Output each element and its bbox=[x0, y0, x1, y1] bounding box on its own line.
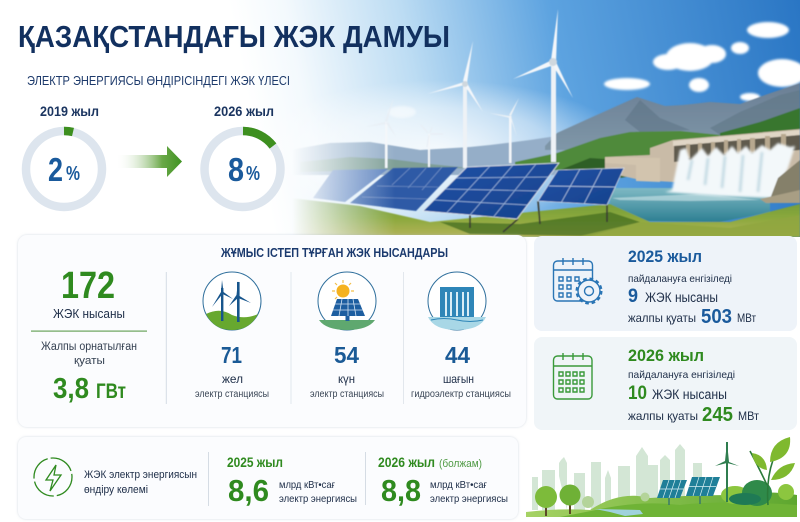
solar stations: күн bbox=[338, 372, 355, 386]
total facilities and capacity: 172 bbox=[61, 265, 115, 307]
donut: 2026 share 8%: 8 bbox=[228, 151, 244, 188]
panel: generation volume bbox=[18, 437, 518, 519]
panel: 2025 commissioning: ЖЭК нысаны bbox=[645, 290, 718, 305]
city skyline bbox=[532, 444, 702, 510]
hydro stations bbox=[411, 272, 511, 400]
mountains bbox=[545, 83, 800, 150]
wind stations bbox=[195, 272, 269, 400]
icon: calendar bbox=[554, 353, 592, 399]
panel: 2025 commissioning: 2025 жыл bbox=[628, 247, 702, 266]
donut: 2019 share 2% bbox=[26, 103, 102, 207]
2026 forecast generation: 2026 жыл bbox=[378, 455, 435, 470]
total facilities and capacity: Жалпы орнатылған bbox=[41, 341, 137, 353]
panel: 2026 commissioning: жалпы қуаты bbox=[628, 409, 698, 423]
total facilities and capacity: қуаты bbox=[74, 355, 105, 367]
2025 generation: электр энергиясы bbox=[279, 493, 357, 505]
hero photo: renewable energy landscape bbox=[266, 0, 800, 237]
wind stations: электр станциясы bbox=[195, 389, 269, 400]
panel: 2026 commissioning: ЖЭК нысаны bbox=[652, 387, 727, 402]
small solar panels bbox=[657, 477, 720, 505]
wind stations: 71 bbox=[221, 342, 242, 368]
bushes bbox=[721, 480, 772, 506]
green hills bbox=[515, 131, 720, 170]
trees bbox=[535, 484, 794, 516]
panel: 2026 commissioning: 245 bbox=[702, 404, 733, 426]
panel: 2025 commissioning: МВт bbox=[737, 311, 756, 325]
dam bbox=[605, 129, 800, 182]
heading: operating facilities: ЖҰМЫС ІСТЕП ТҰРҒАН ЖЭК НЫСАНДАРЫ bbox=[220, 245, 448, 260]
panel: 2025 commissioning: жалпы қуаты bbox=[628, 311, 696, 325]
2026 forecast generation: электр энергиясы bbox=[430, 493, 508, 505]
water bbox=[610, 188, 770, 222]
panel: generation volume: өндіру көлемі bbox=[84, 484, 148, 496]
panel: 2026 commissioning: МВт bbox=[738, 409, 759, 423]
donut: 2026 share 8%: % bbox=[246, 163, 260, 185]
panel: 2025 commissioning: 503 bbox=[701, 306, 732, 328]
wind stations: жел bbox=[222, 372, 243, 386]
panel: generation volume: ЖЭК электр энергиясын bbox=[84, 469, 197, 481]
panel: 2026 commissioning bbox=[534, 337, 797, 430]
donut: 2026 share 8% bbox=[204, 103, 280, 207]
icon: hydro dam bbox=[428, 272, 486, 330]
hydro stations: шағын bbox=[443, 372, 474, 386]
clouds bbox=[388, 22, 800, 118]
icon: calendar with gear bbox=[554, 258, 601, 303]
turbine bbox=[715, 442, 739, 502]
total facilities and capacity: ГВт bbox=[96, 380, 126, 403]
solar stations: электр станциясы bbox=[310, 389, 384, 400]
donut: 2026 share 8%: 2026 жыл bbox=[214, 103, 274, 119]
hydro stations: 44 bbox=[445, 342, 470, 368]
2026 forecast generation: 8,8 bbox=[381, 473, 421, 508]
leaves bbox=[750, 437, 795, 505]
2025 generation bbox=[227, 455, 357, 508]
2026 forecast generation: млрд кВт•сағ bbox=[430, 479, 487, 491]
total facilities and capacity: 3,8 bbox=[53, 373, 89, 405]
panel: 2025 commissioning bbox=[534, 236, 797, 331]
solar panels bbox=[313, 163, 624, 232]
2026 forecast generation: (болжам) bbox=[439, 458, 482, 470]
panel: 2026 commissioning: 2026 жыл bbox=[628, 346, 704, 365]
hydro stations: гидроэлектр станциясы bbox=[411, 389, 511, 400]
icon: wind turbines bbox=[203, 272, 261, 330]
2025 generation: 8,6 bbox=[228, 473, 269, 508]
solar stations bbox=[310, 272, 384, 400]
solar stations: 54 bbox=[334, 342, 359, 368]
total facilities and capacity bbox=[31, 265, 147, 405]
wind turbines bbox=[365, 9, 573, 168]
panel: operating renewable facilities bbox=[18, 235, 526, 427]
panel: 2025 commissioning: пайдалануға енгізіледі bbox=[628, 273, 732, 285]
panel: 2026 commissioning: 10 bbox=[628, 383, 647, 404]
donut: 2019 share 2%: 2019 жыл bbox=[40, 103, 99, 119]
panel: 2026 commissioning: пайдалануға енгізіледі bbox=[628, 369, 735, 381]
donut: 2019 share 2%: % bbox=[66, 163, 80, 185]
panel: 2025 commissioning: 9 bbox=[628, 286, 638, 307]
waterfall bbox=[665, 143, 795, 198]
far hills bbox=[300, 136, 564, 176]
grass bbox=[290, 198, 800, 237]
2025 generation: 2025 жыл bbox=[227, 455, 283, 470]
donut: 2019 share 2%: 2 bbox=[48, 151, 63, 188]
total facilities and capacity: ЖЭК нысаны bbox=[53, 306, 125, 321]
icon: lightning in circle bbox=[34, 458, 72, 496]
title: ҚАЗАҚСТАНДАҒЫ ЖЭК ДАМУЫ bbox=[18, 19, 450, 54]
arrow: growth bbox=[118, 146, 182, 177]
2025 generation: млрд кВт•сағ bbox=[279, 479, 335, 491]
illustration: green city bbox=[526, 437, 797, 517]
subtitle: share of renewables: ЭЛЕКТР ЭНЕРГИЯСЫ ӨНДІРІСІНДЕГІ ЖЭК ҮЛЕСІ bbox=[27, 74, 290, 88]
icon: solar panel and sun bbox=[318, 272, 376, 330]
2026 forecast generation bbox=[378, 455, 508, 508]
